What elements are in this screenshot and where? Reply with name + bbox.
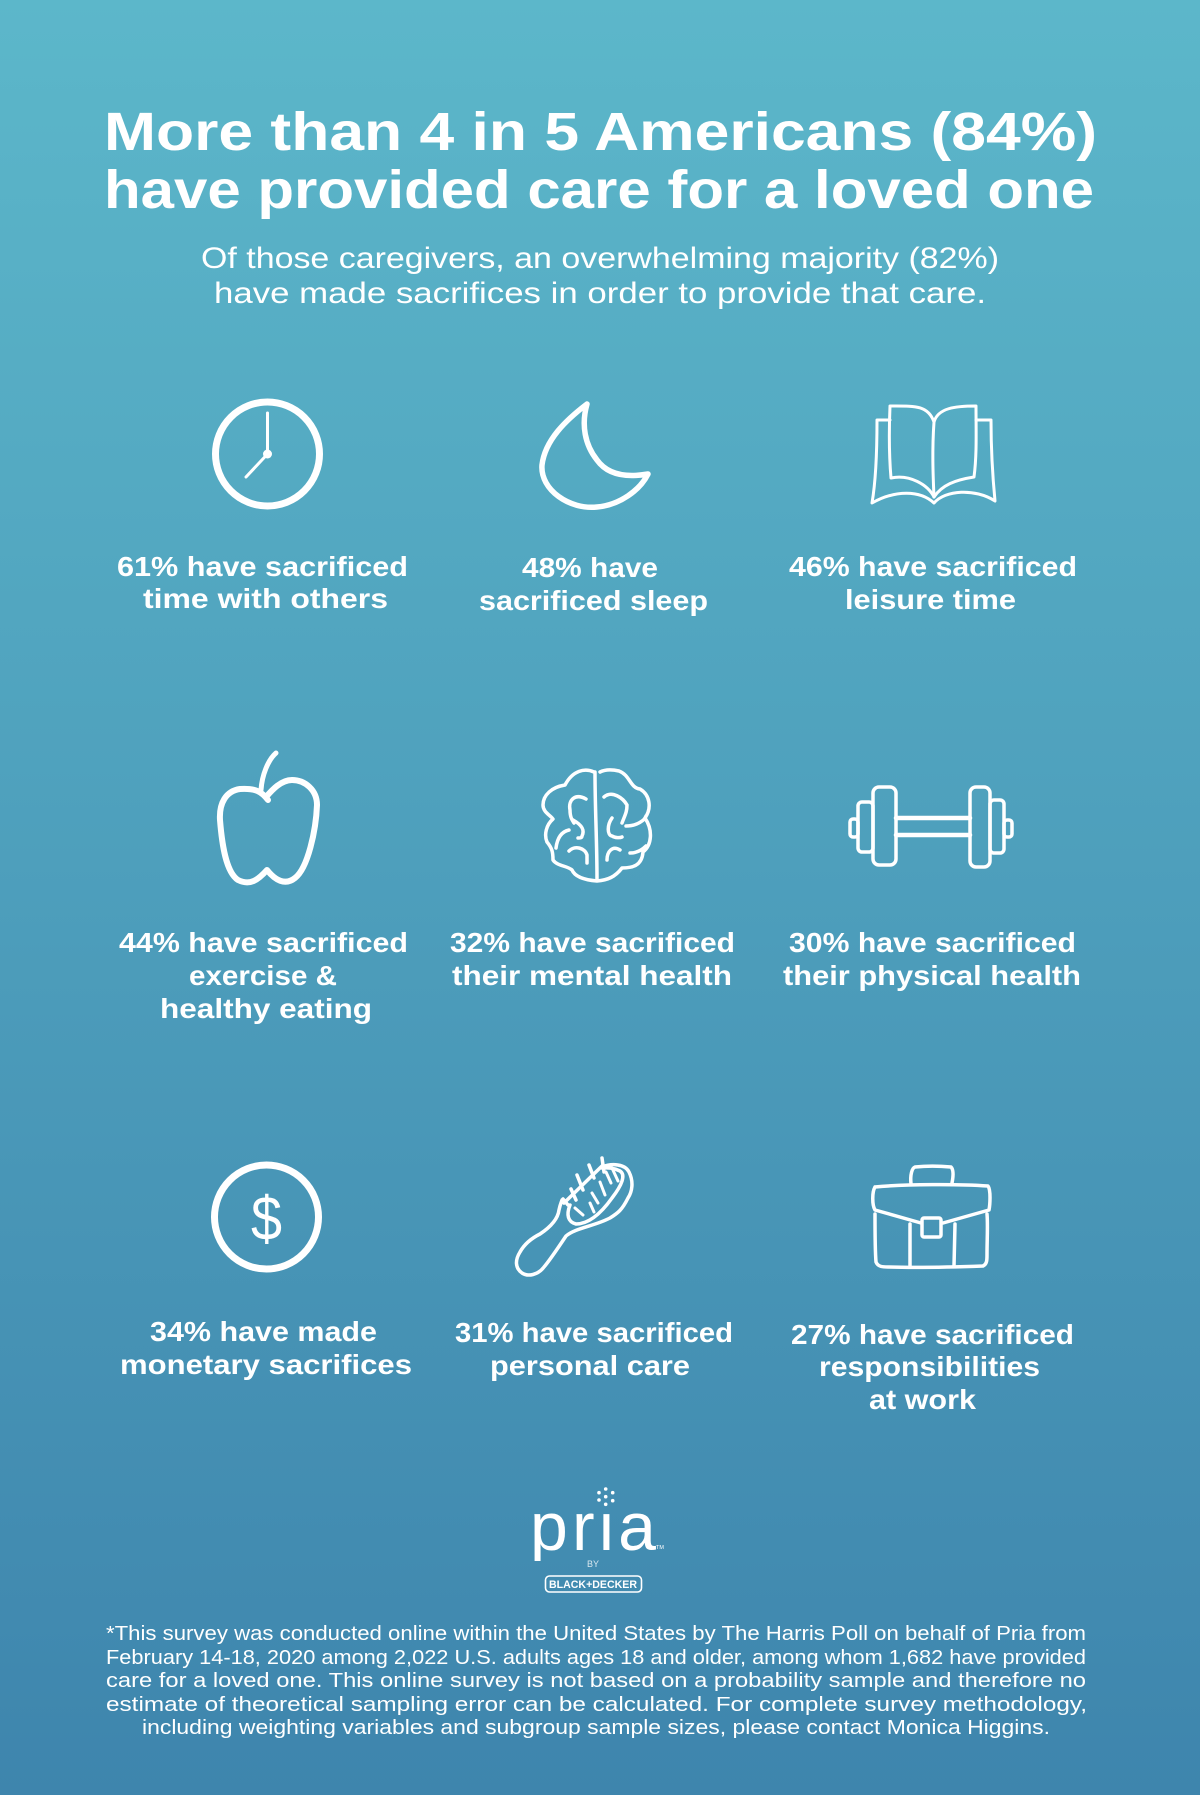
label: 31% personal care: personal care xyxy=(490,1350,690,1381)
title: More than 4 in 5 Americans (84%) xyxy=(104,102,1097,162)
label: 30% physical health: 30% have sacrificed xyxy=(789,927,1076,958)
label: 46% leisure time xyxy=(789,551,1077,615)
label: 44% exercise and healthy eating: 44% have sacrificed xyxy=(119,927,408,958)
label: 32% mental health xyxy=(450,927,735,991)
footnote: care for a loved one. This online survey is not based on a probability sample and therefore no xyxy=(106,1669,1086,1692)
badge: Black+Decker: BLACK+DECKER xyxy=(549,1579,637,1591)
label: 31% personal care: 31% have sacrificed xyxy=(455,1317,733,1348)
label: 61% time with others xyxy=(117,551,408,614)
icon: dollar coin xyxy=(214,1165,318,1269)
panel: mental health xyxy=(450,770,735,991)
icon: briefcase xyxy=(873,1166,990,1267)
label: 34% monetary sacrifices: monetary sacrifices xyxy=(120,1349,412,1380)
label: 27% responsibilities at work: 27% have sacrificed xyxy=(791,1319,1074,1350)
label: 34% monetary sacrifices: 34% have made xyxy=(150,1316,377,1347)
label: 48% sleep: 48% have xyxy=(522,552,658,583)
label: 32% mental health: 32% have sacrificed xyxy=(450,927,735,958)
subtitle xyxy=(201,242,999,310)
footnote: *This survey was conducted online within the United States by The Harris Poll on behalf of Pria from xyxy=(106,1622,1086,1645)
label: 30% physical health xyxy=(783,927,1081,991)
icon: brain xyxy=(543,770,650,881)
icon: dumbbell xyxy=(850,787,1012,867)
panel: time with others xyxy=(117,402,408,614)
icon: clock xyxy=(216,402,320,506)
label: 61% time with others: 61% have sacrificed xyxy=(117,551,408,582)
panel: physical health xyxy=(783,787,1081,991)
icon: hairbrush xyxy=(516,1158,632,1275)
title: have provided care for a loved one xyxy=(104,160,1094,220)
panel: monetary sacrifices xyxy=(120,1165,412,1380)
label: 44% exercise and healthy eating xyxy=(119,927,408,1024)
label: 46% leisure time: 46% have sacrificed xyxy=(789,551,1077,582)
label: 30% physical health: their physical health xyxy=(783,960,1081,991)
icon: open book xyxy=(872,406,995,503)
label: 32% mental health: their mental health xyxy=(452,960,732,991)
footnote: estimate of theoretical sampling error can be calculated. For complete survey methodology, xyxy=(106,1693,1087,1716)
label: 44% exercise and healthy eating: exercise & xyxy=(189,960,337,991)
footnote: including weighting variables and subgroup sample sizes, please contact Monica Higgins. xyxy=(142,1716,1050,1739)
label: 27% responsibilities at work: responsibilities xyxy=(819,1351,1040,1382)
panel: responsibilities at work xyxy=(791,1166,1074,1415)
label: 27% responsibilities at work xyxy=(791,1319,1074,1415)
label: 48% sleep xyxy=(479,552,708,616)
label: 61% time with others: time with others xyxy=(143,583,388,614)
icon: moon xyxy=(542,404,648,507)
label: 27% responsibilities at work: at work xyxy=(869,1384,976,1415)
icon: apple xyxy=(220,753,317,882)
label: 44% exercise and healthy eating: healthy eating xyxy=(160,993,372,1024)
label: 31% personal care xyxy=(455,1317,733,1381)
wordmark: pria: pria xyxy=(530,1489,656,1565)
panel: leisure time xyxy=(789,406,1077,615)
panel: sleep xyxy=(479,404,708,616)
title xyxy=(104,102,1097,220)
icon: dollar coin: $ xyxy=(251,1185,282,1254)
subtitle: Of those caregivers, an overwhelming majority (82%) xyxy=(201,242,999,275)
by text: BY xyxy=(587,1559,599,1569)
label: 46% leisure time: leisure time xyxy=(845,584,1016,615)
trademark: TM xyxy=(656,1545,664,1551)
panel: personal care xyxy=(455,1158,733,1381)
footnote xyxy=(106,1622,1087,1739)
logo: pria by Black+Decker xyxy=(530,1487,664,1592)
label: 48% sleep: sacrificed sleep xyxy=(479,585,708,616)
label: 34% monetary sacrifices xyxy=(120,1316,412,1380)
panel: exercise and healthy eating xyxy=(119,753,408,1024)
subtitle: have made sacrifices in order to provide that care. xyxy=(214,277,986,310)
footnote: February 14-18, 2020 among 2,022 U.S. adults ages 18 and older, among whom 1,682 have provided xyxy=(106,1646,1086,1669)
icon: sparkle dots xyxy=(597,1487,614,1506)
